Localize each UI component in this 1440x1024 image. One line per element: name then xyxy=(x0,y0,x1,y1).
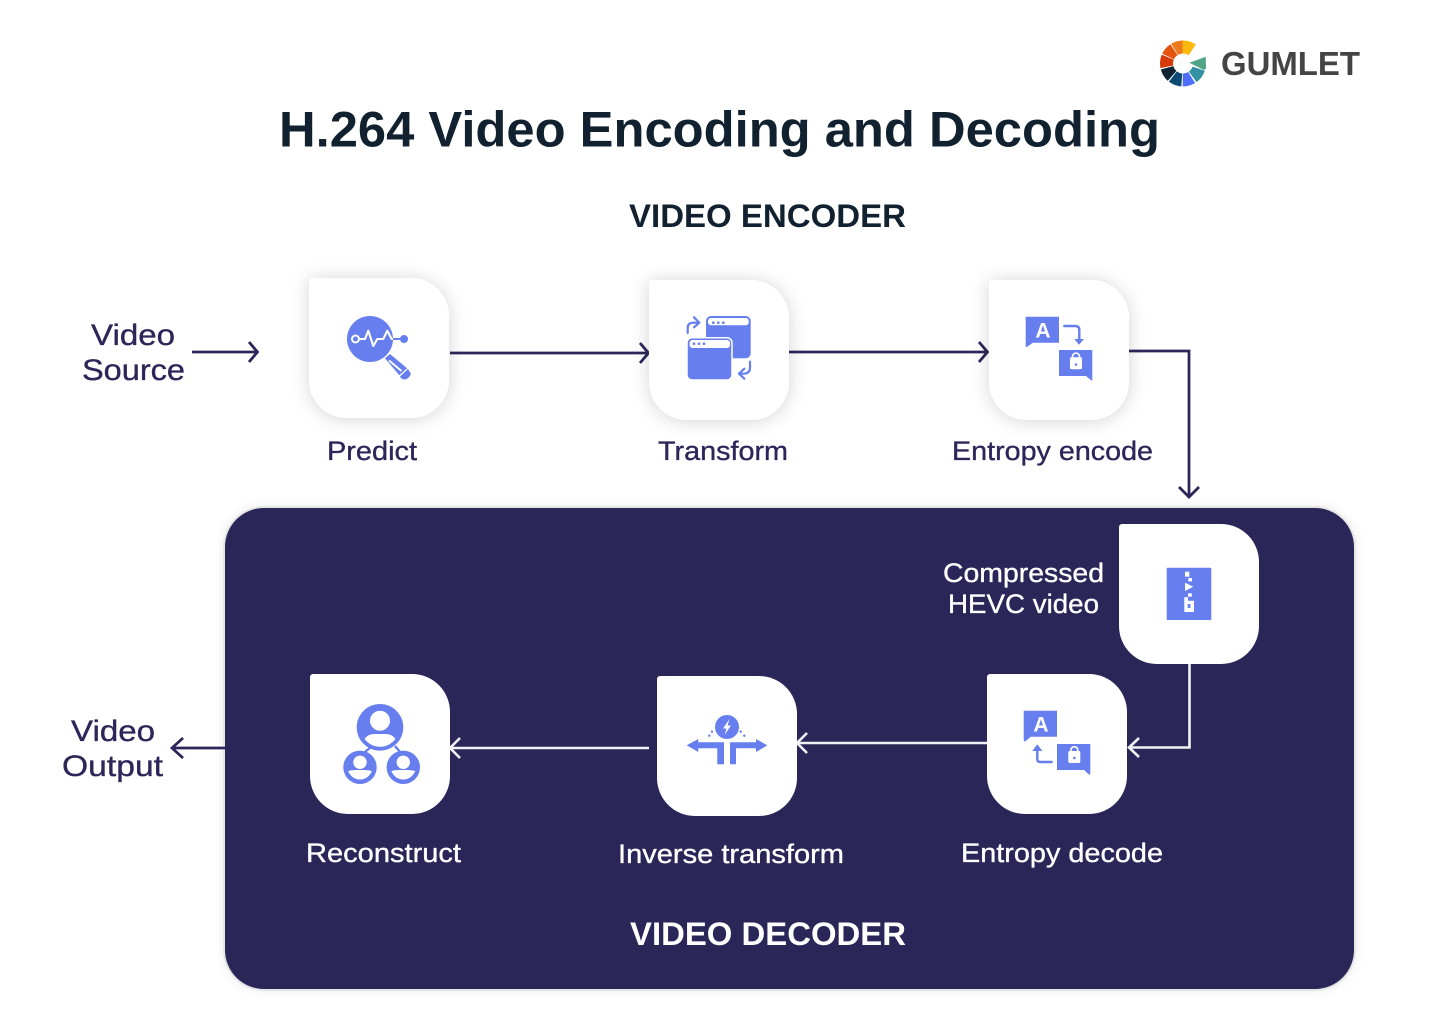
label: video source: Video xyxy=(91,319,175,352)
arrow: source to predict xyxy=(192,342,258,362)
label: entropy decode: Entropy decode xyxy=(961,838,1163,868)
heading: video decoder: VIDEO DECODER xyxy=(630,916,906,952)
icon: swapping windows xyxy=(687,316,751,380)
heading: video encoder: VIDEO ENCODER xyxy=(629,198,906,234)
card: compressed video xyxy=(1119,524,1259,664)
card: predict xyxy=(309,278,449,418)
logo wheel xyxy=(1160,40,1206,87)
icon: letter bubble to lock bubble: A xyxy=(1035,320,1051,342)
icon: people network xyxy=(343,704,420,784)
icon: lock bubble to letter bubble: A xyxy=(1033,714,1049,736)
card: entropy decode xyxy=(987,674,1127,814)
label: compressed HEVC video: Compressed xyxy=(943,558,1104,588)
arrow: inverse transform to reconstruct xyxy=(450,738,649,758)
logo wordmark: GUMLET xyxy=(1221,45,1360,82)
arrow: decoder to video output xyxy=(172,738,225,758)
label: predict: Predict xyxy=(327,436,418,466)
label: inverse transform: Inverse transform xyxy=(618,839,844,869)
arrow: compressed video to entropy decode xyxy=(1129,664,1190,757)
card: entropy encode xyxy=(989,280,1129,420)
arrow: transform to entropy encode xyxy=(789,342,988,362)
label: video output xyxy=(62,715,164,783)
arrow: entropy decode to inverse transform xyxy=(797,733,987,753)
card: reconstruct xyxy=(310,674,450,814)
label: entropy encode: Entropy encode xyxy=(952,436,1153,466)
label: reconstruct: Reconstruct xyxy=(306,838,462,868)
title: H.264 Video Encoding and Decoding xyxy=(279,102,1160,158)
panel: video decoder background xyxy=(224,507,1355,990)
label: video output: Video xyxy=(71,715,155,748)
label: compressed HEVC video xyxy=(943,558,1104,619)
label: video source xyxy=(82,319,185,387)
logo: Gumlet xyxy=(1160,40,1360,87)
arrow: predict to transform xyxy=(450,343,648,363)
icon: magnifier with pulse xyxy=(347,316,411,380)
card: inverse transform xyxy=(657,676,797,816)
label: compressed HEVC video: HEVC video xyxy=(948,589,1099,619)
arrow: entropy encode to compressed video xyxy=(1129,351,1199,497)
icon: zipped video file xyxy=(1167,568,1211,620)
icon: letter bubble to lock bubble xyxy=(1026,317,1092,381)
label: video output: Output xyxy=(62,750,164,783)
card: transform xyxy=(649,280,789,420)
icon: split arrows with bolt xyxy=(687,715,767,764)
icon: lock bubble to letter bubble xyxy=(1024,711,1090,775)
label: transform: Transform xyxy=(658,436,788,466)
label: video source: Source xyxy=(82,354,185,387)
